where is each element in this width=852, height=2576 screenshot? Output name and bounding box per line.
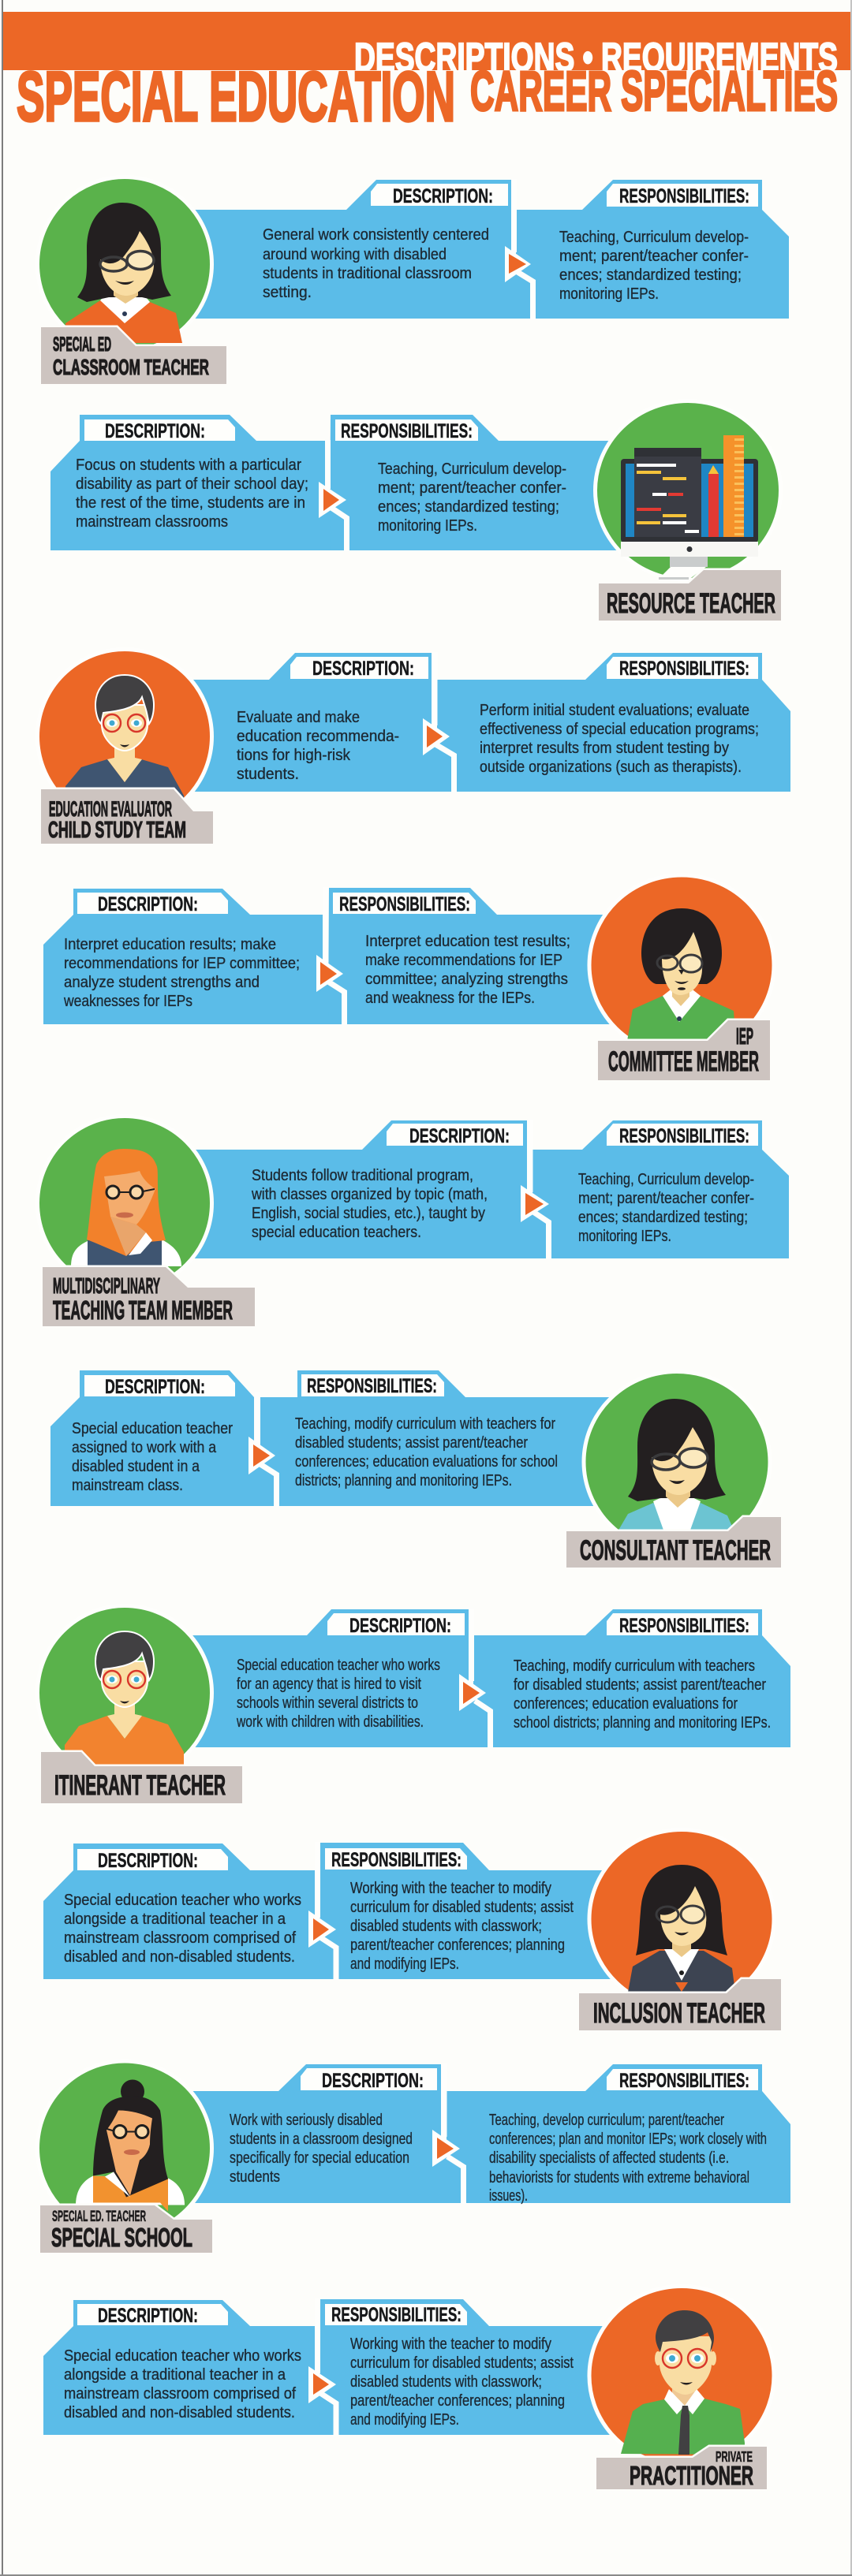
arrow bbox=[423, 652, 454, 792]
row 6: consultant teacher bbox=[50, 1370, 781, 1568]
panel: responsibilities: Working with the teacher to modify bbox=[350, 1880, 551, 1897]
panel: responsibilities: parent/teacher conferences; planning bbox=[350, 2392, 565, 2410]
panel: description: Special education teacher who works bbox=[64, 2347, 301, 2365]
icon: computer with books bbox=[595, 401, 781, 580]
panel: description: Interpret education results; make bbox=[64, 936, 276, 953]
panel: responsibilities: monitoring IEPs. bbox=[578, 1228, 671, 1245]
name badge bbox=[598, 1020, 770, 1080]
avatar: woman with orange hair bbox=[38, 1117, 211, 1290]
arrow bbox=[308, 2298, 336, 2436]
name badge bbox=[40, 2205, 212, 2253]
panel: responsibilities: for disabled students; assist parent/teacher bbox=[514, 1676, 766, 1694]
panel: responsibilities: behaviorists for students with extreme behavioral bbox=[489, 2169, 749, 2186]
name badge: SPECIAL ED bbox=[53, 334, 111, 356]
panel: description: specifically for special education bbox=[230, 2149, 409, 2167]
panel: description: Special education teacher who works bbox=[237, 1657, 440, 1674]
panel: responsibilities: ment; parent/teacher confer- bbox=[578, 1190, 754, 1207]
name badge: SPECIAL ED. TEACHER bbox=[52, 2209, 146, 2225]
panel: description: Work with seriously disabled bbox=[230, 2112, 383, 2129]
panel: description: DESCRIPTION: bbox=[312, 658, 414, 680]
avatar: woman with green sweater bbox=[589, 875, 774, 1055]
panel: responsibilities bbox=[447, 2064, 790, 2205]
panel: responsibilities: RESPONSIBILITIES: bbox=[619, 185, 749, 207]
panel: responsibilities: and modifying IEPs. bbox=[350, 2411, 459, 2429]
name badge bbox=[579, 1979, 781, 2030]
panel: responsibilities bbox=[437, 653, 790, 792]
panel: responsibilities: Teaching, develop curriculum; parent/teacher bbox=[489, 2112, 724, 2129]
panel: description: the rest of the time, students are in bbox=[76, 494, 305, 512]
panel: responsibilities: school districts; planning and monitoring IEPs. bbox=[514, 1714, 771, 1732]
panel: responsibilities bbox=[473, 1609, 790, 1747]
arrow bbox=[308, 1842, 336, 1980]
panel: responsibilities: Teaching, modify curriculum with teachers for bbox=[295, 1415, 555, 1433]
panel: description: students. bbox=[237, 766, 299, 783]
panel: responsibilities: RESPONSIBILITIES: bbox=[619, 658, 749, 680]
panel: description: General work consistently centered bbox=[263, 226, 489, 244]
panel: responsibilities: RESPONSIBILITIES: bbox=[331, 1849, 462, 1871]
panel: description: DESCRIPTION: bbox=[409, 1125, 510, 1147]
panel: responsibilities: interpret results from student testing by bbox=[480, 740, 729, 757]
panel: description bbox=[50, 1370, 274, 1506]
panel: responsibilities bbox=[328, 888, 682, 1024]
panel: description: DESCRIPTION: bbox=[98, 2305, 198, 2327]
panel: responsibilities: monitoring IEPs. bbox=[378, 517, 477, 535]
row 9: special school teacher bbox=[38, 2061, 790, 2253]
panel: responsibilities: Working with the teacher to modify bbox=[350, 2336, 551, 2353]
panel: responsibilities: RESPONSIBILITIES: bbox=[619, 1615, 749, 1637]
panel: responsibilities: conferences; education evaluations for school bbox=[295, 1453, 558, 1471]
panel: description: for an agency that is hired to visit bbox=[237, 1676, 421, 1693]
panel: responsibilities: effectiveness of special education programs; bbox=[480, 721, 759, 738]
panel: description: assigned to work with a bbox=[72, 1439, 217, 1456]
row 1: special ed classroom teacher bbox=[38, 177, 789, 384]
panel: responsibilities: districts; planning and monitoring IEPs. bbox=[295, 1472, 512, 1489]
panel: description: Special education teacher bbox=[72, 1420, 233, 1437]
panel: responsibilities: and weakness for the IEPs. bbox=[365, 990, 535, 1007]
arrow bbox=[521, 1120, 549, 1259]
panel: description: English, social studies, etc.), taught by bbox=[252, 1205, 485, 1222]
panel: description: tions for high-risk bbox=[237, 747, 351, 764]
row 4: IEP committee member bbox=[43, 875, 774, 1080]
panel: description: students in a classroom designed bbox=[230, 2131, 413, 2148]
panel: description: disabled student in a bbox=[72, 1458, 200, 1475]
panel: description: disabled and non-disabled students. bbox=[64, 1948, 295, 1966]
name badge bbox=[599, 570, 781, 621]
name badge bbox=[566, 1517, 781, 1568]
panel: description bbox=[125, 180, 531, 319]
panel: description: analyze student strengths and bbox=[64, 974, 260, 991]
panel: responsibilities bbox=[330, 415, 687, 550]
name badge: SPECIAL SCHOOL bbox=[51, 2223, 192, 2252]
panel: description bbox=[43, 889, 342, 1024]
panel: responsibilities: ences; standardized testing; bbox=[559, 267, 742, 284]
panel: description: around working with disabled bbox=[263, 246, 447, 263]
panel: description bbox=[43, 1843, 334, 1979]
panel: responsibilities: disability specialists of affected students (i.e. bbox=[489, 2149, 729, 2167]
panel: description: setting. bbox=[263, 284, 312, 301]
panel: description: DESCRIPTION: bbox=[349, 1615, 451, 1637]
avatar: woman with orange sweater bbox=[38, 177, 211, 352]
name badge: CHILD STUDY TEAM bbox=[48, 818, 186, 843]
panel: description: special education teachers. bbox=[252, 1224, 421, 1241]
panel: description: students bbox=[230, 2168, 280, 2186]
avatar: woman with teal blouse bbox=[584, 1372, 770, 1552]
panel: description: work with children with disabilities. bbox=[236, 1713, 424, 1731]
panel: description: DESCRIPTION: bbox=[98, 1850, 198, 1872]
arrow bbox=[319, 440, 347, 551]
name badge: PRACTITIONER bbox=[630, 2461, 753, 2490]
arrow bbox=[459, 1609, 491, 1748]
panel: responsibilities bbox=[516, 180, 789, 319]
name badge: IEP bbox=[736, 1024, 753, 1049]
panel: responsibilities: committee; analyzing strengths bbox=[365, 971, 568, 988]
panel: description: Students follow traditional program, bbox=[252, 1167, 473, 1184]
panel: description: mainstream classrooms bbox=[76, 513, 228, 531]
row 10: private practitioner bbox=[43, 2287, 774, 2490]
panel: responsibilities: disabled students with classwork; bbox=[350, 1918, 542, 1935]
name badge: MULTIDISCIPLINARY bbox=[53, 1273, 160, 1298]
panel: description: disability as part of their school day; bbox=[76, 475, 308, 493]
panel: responsibilities: Teaching, Curriculum develop- bbox=[559, 229, 749, 246]
name badge: TEACHING TEAM MEMBER bbox=[53, 1295, 233, 1325]
arrow bbox=[316, 887, 344, 1025]
title: special education: SPECIAL EDUCATION bbox=[17, 57, 455, 136]
panel: responsibilities: conferences; education evaluations for bbox=[514, 1695, 738, 1713]
panel: description: schools within several districts to bbox=[237, 1694, 418, 1712]
row 2: resource teacher bbox=[50, 401, 781, 621]
avatar: woman with bun bbox=[38, 2061, 211, 2235]
panel: description: DESCRIPTION: bbox=[105, 420, 205, 442]
panel: description bbox=[125, 2064, 462, 2203]
panel: description: with classes organized by topic (math, bbox=[251, 1186, 488, 1203]
panel: responsibilities: parent/teacher conferences; planning bbox=[350, 1937, 565, 1954]
panel: description bbox=[43, 2300, 334, 2435]
panel: description: DESCRIPTION: bbox=[105, 1376, 205, 1398]
panel: description: students in traditional classroom bbox=[263, 265, 472, 282]
name badge: PRIVATE bbox=[716, 2449, 753, 2465]
panel: responsibilities: curriculum for disabled students; assist bbox=[350, 2354, 574, 2372]
row 5: multidisciplinary teaching team member bbox=[38, 1117, 789, 1326]
panel: description: alongside a traditional teacher in a bbox=[64, 1911, 286, 1928]
panel: responsibilities: RESPONSIBILITIES: bbox=[307, 1375, 437, 1397]
panel: description bbox=[50, 415, 345, 550]
panel: responsibilities: make recommendations for IEP bbox=[365, 952, 562, 969]
panel: responsibilities: Teaching, Curriculum develop- bbox=[578, 1171, 754, 1188]
panel: responsibilities: curriculum for disabled students; assist bbox=[350, 1899, 574, 1916]
panel: responsibilities bbox=[320, 1843, 682, 1979]
panel: description: DESCRIPTION: bbox=[322, 2070, 424, 2092]
panel: description: mainstream class. bbox=[72, 1477, 183, 1494]
panel: responsibilities: ment; parent/teacher confer- bbox=[559, 248, 749, 265]
panel: description: Focus on students with a particular bbox=[76, 457, 301, 474]
panel: description: Evaluate and make bbox=[237, 709, 360, 726]
arrow bbox=[248, 1392, 276, 1507]
name badge bbox=[41, 1752, 242, 1803]
panel: responsibilities: RESPONSIBILITIES: bbox=[339, 893, 470, 915]
panel: responsibilities: Teaching, Curriculum develop- bbox=[378, 460, 566, 478]
panel: description bbox=[125, 653, 452, 792]
panel: responsibilities bbox=[532, 1120, 789, 1258]
panel: responsibilities: ment; parent/teacher confer- bbox=[378, 479, 566, 497]
panel: description: disabled and non-disabled students. bbox=[64, 2404, 295, 2421]
panel: responsibilities: Teaching, modify curriculum with teachers bbox=[514, 1657, 755, 1675]
name badge bbox=[41, 789, 213, 844]
panel: description: recommendations for IEP committee; bbox=[64, 955, 300, 972]
arrow bbox=[432, 2063, 464, 2204]
avatar: man with green shirt and tie bbox=[589, 2287, 774, 2465]
panel: responsibilities: RESPONSIBILITIES: bbox=[331, 2304, 462, 2326]
panel: responsibilities: RESPONSIBILITIES: bbox=[619, 2070, 749, 2092]
panel: responsibilities: RESPONSIBILITIES: bbox=[341, 420, 473, 442]
name badge: CLASSROOM TEACHER bbox=[53, 355, 209, 379]
header band bbox=[3, 12, 850, 70]
panel: responsibilities: issues). bbox=[489, 2187, 528, 2205]
panel: description: mainstream classroom comprised of bbox=[64, 1929, 296, 1947]
panel: description: Special education teacher who works bbox=[64, 1892, 301, 1909]
name badge: ITINERANT TEACHER bbox=[54, 1770, 226, 1801]
panel: responsibilities bbox=[320, 2299, 682, 2435]
panel: responsibilities: RESPONSIBILITIES: bbox=[619, 1125, 749, 1147]
avatar: man with navy shirt bbox=[38, 650, 211, 823]
panel: description bbox=[125, 1609, 488, 1747]
avatar: woman with dark suit bbox=[589, 1829, 774, 2009]
name badge bbox=[41, 327, 226, 384]
panel: description: weaknesses for IEPs bbox=[63, 993, 192, 1010]
panel: description: alongside a traditional teacher in a bbox=[64, 2366, 286, 2384]
panel: responsibilities: Perform initial student evaluations; evaluate bbox=[480, 702, 749, 719]
panel: responsibilities bbox=[260, 1370, 677, 1506]
panel: responsibilities: monitoring IEPs. bbox=[559, 285, 659, 303]
name badge bbox=[596, 2447, 767, 2490]
panel: description: mainstream classroom comprised of bbox=[64, 2385, 296, 2403]
row 8: inclusion teacher bbox=[43, 1829, 781, 2030]
header bbox=[3, 12, 850, 136]
panel: responsibilities: disabled students with classwork; bbox=[350, 2373, 542, 2391]
panel: description: education recommenda- bbox=[237, 728, 399, 745]
arrow bbox=[505, 179, 533, 319]
row 7: itinerant teacher bbox=[38, 1605, 790, 1803]
avatar: man with orange shirt bbox=[38, 1605, 211, 1780]
name badge bbox=[43, 1267, 255, 1326]
row 3: education evaluator bbox=[38, 650, 790, 844]
panel: responsibilities: ences; standardized testing; bbox=[578, 1209, 748, 1226]
name badge: EDUCATION EVALUATOR bbox=[49, 797, 172, 821]
panel: responsibilities: and modifying IEPs. bbox=[350, 1955, 459, 1973]
panel: responsibilities: ences; standardized testing; bbox=[378, 498, 559, 516]
panel: responsibilities: disabled students; assist parent/teacher bbox=[295, 1434, 528, 1452]
panel: description: DESCRIPTION: bbox=[393, 185, 493, 207]
panel: responsibilities: Interpret education test results; bbox=[365, 933, 570, 950]
panel: description: DESCRIPTION: bbox=[98, 893, 198, 915]
panel: description bbox=[125, 1120, 547, 1258]
panel: responsibilities: outside organizations (such as therapists). bbox=[480, 759, 742, 776]
